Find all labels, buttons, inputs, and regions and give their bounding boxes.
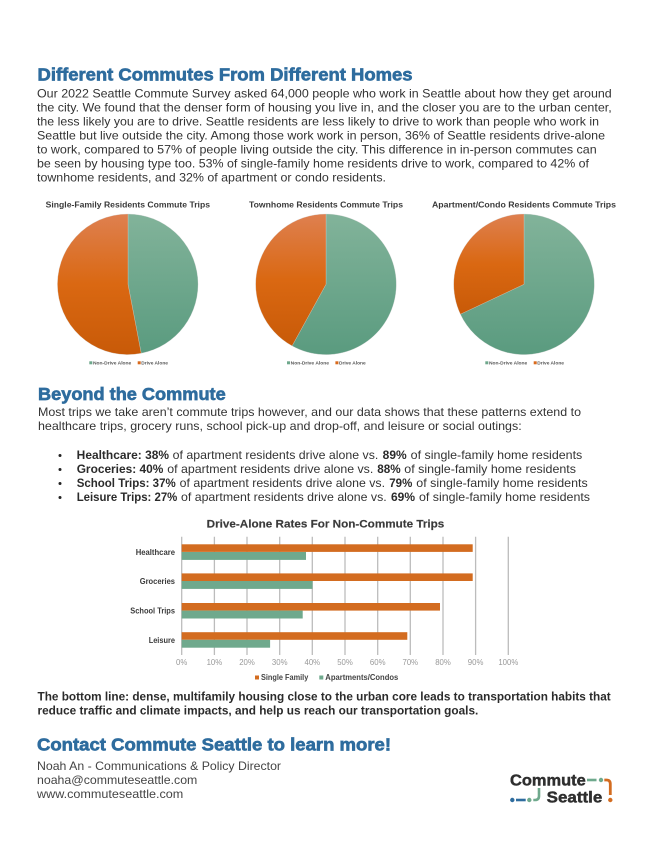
- axis tick labels: 80%: [435, 658, 451, 667]
- axis tick labels: 20%: [239, 658, 255, 667]
- bullet: leisure trips: 69%: [391, 490, 415, 504]
- text block: second paragraph: healthcare trips, grocery runs, school pick-up and drop-off, and leisure or social outings:: [38, 419, 522, 433]
- pie legend: Drive Alone: [339, 360, 366, 365]
- heading: contact: Contact Commute Seattle to learn more!: [37, 735, 391, 755]
- bullet: school trips: 79%: [389, 476, 413, 490]
- bullet: school trips: School Trips: 37%: [77, 476, 176, 490]
- bullet: healthcare: of single-family home residents: [411, 448, 582, 462]
- axis tick labels: [176, 658, 518, 667]
- logo: Commute Seattle: Seattle: [547, 789, 602, 806]
- pie chart: townhome residents: [249, 201, 403, 365]
- axis tick labels: 0%: [176, 658, 187, 667]
- bullet: leisure trips: Leisure Trips: 27%: [77, 490, 178, 504]
- chart legend: Single Family: [261, 673, 309, 682]
- bar chart: drive-alone rates for non-commute trips: [130, 518, 518, 682]
- category labels: Groceries: [140, 577, 176, 586]
- bullet: healthcare: 89%: [383, 448, 407, 462]
- pie chart: single-family residents: [46, 201, 210, 365]
- text block: intro paragraph: Seattle but live outside the city. Among those work work in person, 36% of Seattle residents drive-alone: [37, 128, 605, 142]
- pie title: Single-Family Residents Commute Trips: [46, 201, 210, 210]
- text block: contact details: [36, 759, 281, 801]
- text block: bottom line: The bottom line: dense, multifamily housing close to the urban core leads to transportation habits that: [38, 690, 611, 704]
- pie legend: Non-Drive Alone: [93, 360, 132, 365]
- axis tick labels: 100%: [498, 658, 518, 667]
- text block: bottom line: reduce traffic and climate impacts, and help us reach our transportation goals.: [38, 704, 478, 718]
- bullet: leisure trips: of apartment residents drive alone vs.: [181, 490, 387, 504]
- bars: apartments/condos: [182, 552, 312, 648]
- text block: intro paragraph: Our 2022 Seattle Commute Survey asked 64,000 people who work in Seattle about how they get around: [37, 86, 612, 100]
- pie legend: [485, 360, 565, 365]
- pie legend: [287, 360, 366, 365]
- bullet list: drive-alone rates by trip type: [58, 448, 590, 504]
- heading: Beyond the Commute: Beyond the Commute: [38, 384, 226, 404]
- pie legend: Non-Drive Alone: [489, 360, 528, 365]
- text block: intro paragraph: [37, 86, 612, 184]
- bullet: groceries: 88%: [377, 462, 401, 476]
- text block: second paragraph: Most trips we take aren’t commute trips however, and our data shows that these patterns extend to: [38, 405, 581, 419]
- bullet: leisure trips: [58, 490, 590, 504]
- pie title: Apartment/Condo Residents Commute Trips: [432, 201, 616, 210]
- category labels: Leisure: [149, 636, 176, 645]
- text block: intro paragraph: to work, compared to 57% of people living outside the city. This difference in in-person commutes can: [37, 142, 597, 156]
- heading: Different Commutes From Different Homes: Different Commutes From Different Homes: [38, 65, 413, 85]
- text block: intro paragraph: the city. We found that the denser form of housing you live in, and the closer you are to the urban center,: [37, 100, 612, 114]
- category labels: Healthcare: [136, 548, 176, 557]
- axis tick labels: 30%: [272, 658, 288, 667]
- bullet: groceries: of single-family home residents: [404, 462, 576, 476]
- axis tick labels: 10%: [207, 658, 222, 667]
- text block: contact details: noaha@commuteseattle.com: [37, 773, 197, 787]
- axis tick labels: 40%: [304, 658, 320, 667]
- bullet: groceries: of apartment residents drive alone vs.: [167, 462, 373, 476]
- text block: bottom line: [38, 690, 611, 718]
- text block: intro paragraph: townhome residents, and 32% of apartment or condo residents.: [37, 170, 386, 184]
- category labels: [130, 548, 176, 645]
- axis tick labels: 60%: [370, 658, 386, 667]
- axis tick labels: 90%: [468, 658, 483, 667]
- pie slices: [57, 214, 198, 355]
- chart legend: Apartments/Condos: [325, 673, 399, 682]
- bullet: school trips: of apartment residents drive alone vs.: [180, 476, 385, 490]
- pie chart: apartment/condo residents: [432, 201, 616, 365]
- bullet: healthcare: [58, 448, 582, 462]
- text block: contact details: www.commuteseattle.com: [36, 787, 183, 801]
- chart title: Drive-Alone Rates For Non-Commute Trips: [207, 518, 444, 530]
- bullet: healthcare: of apartment residents drive alone vs.: [173, 448, 378, 462]
- bullet: leisure trips: of single-family home residents: [419, 490, 590, 504]
- text block: intro paragraph: be seen by housing type too. 53% of single-family home residents drive to work, compared to 42% of: [37, 156, 590, 170]
- text block: intro paragraph: the less likely you are to drive. Seattle residents are less likely to drive to work than people who work in: [37, 114, 599, 128]
- category labels: School Trips: [130, 607, 176, 616]
- chart legend: [255, 673, 399, 682]
- logo: Commute Seattle: Commute: [510, 773, 586, 790]
- bars: single family: [182, 544, 473, 640]
- pie slices: [454, 214, 594, 355]
- bullet: groceries: [58, 462, 576, 476]
- axis tick labels: 70%: [402, 658, 418, 667]
- text block: contact details: Noah An - Communications & Policy Director: [37, 759, 281, 773]
- pie legend: [89, 360, 169, 365]
- pie title: Townhome Residents Commute Trips: [249, 201, 403, 210]
- pie slices: [256, 214, 396, 355]
- pie legend: Drive Alone: [141, 360, 169, 365]
- pie legend: Non-Drive Alone: [291, 360, 330, 365]
- bullet: healthcare: Healthcare: 38%: [77, 448, 169, 462]
- pie legend: Drive Alone: [537, 360, 565, 365]
- bullet: school trips: of single-family home residents: [416, 476, 588, 490]
- bullet: groceries: Groceries: 40%: [77, 462, 164, 476]
- bullet: school trips: [58, 476, 588, 490]
- axis tick labels: 50%: [337, 658, 353, 667]
- logo: Commute Seattle: [510, 773, 612, 806]
- text block: second paragraph: [38, 405, 581, 433]
